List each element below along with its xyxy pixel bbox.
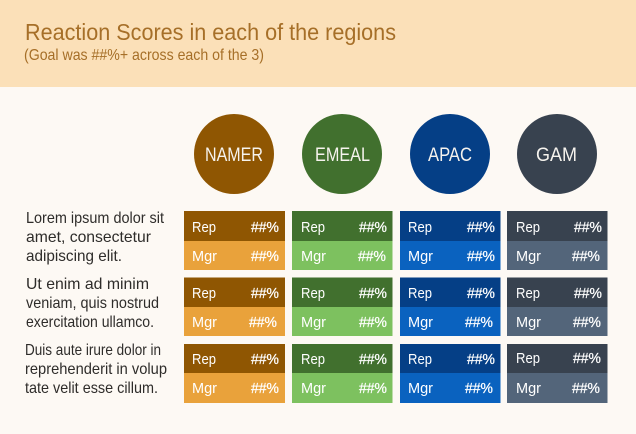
card: APAC row 3: Mgr <box>408 380 433 397</box>
circle: GAM <box>517 114 597 194</box>
card: APAC row 1: Mgr <box>408 248 433 265</box>
card: GAM row 2: ##% <box>573 315 601 331</box>
card: NAMER row 2: ##% <box>251 286 279 302</box>
card: GAM row 1 <box>507 211 608 270</box>
card: GAM row 2: Rep <box>516 285 540 302</box>
card: EMEAL row 1: Mgr <box>301 248 326 265</box>
card: APAC row 1 <box>400 211 500 270</box>
card: EMEAL row 1: Rep <box>301 219 325 236</box>
card: GAM row 1: Rep <box>516 219 540 236</box>
card: NAMER row 3: ##% <box>251 352 279 368</box>
card: GAM row 1: Mgr <box>516 248 541 265</box>
card: APAC row 2: Mgr <box>408 314 433 331</box>
card: GAM row 3 <box>507 344 608 403</box>
circle: NAMER <box>194 114 274 194</box>
circle: GAM: GAM <box>536 145 577 166</box>
card: APAC row 1: ##% <box>467 220 495 236</box>
card: EMEAL row 2 <box>292 278 392 336</box>
row 2 description <box>26 276 159 331</box>
subtitle: (Goal was ##%+ across each of the 3) <box>24 47 264 64</box>
card: GAM row 1: ##% <box>572 249 600 265</box>
card: EMEAL row 3: ##% <box>359 352 387 368</box>
card: EMEAL row 2: Mgr <box>301 314 326 331</box>
card: NAMER row 2: Mgr <box>192 314 217 331</box>
card: NAMER row 1: Rep <box>192 219 216 236</box>
circle: EMEAL <box>302 114 382 194</box>
row 2 description: Ut enim ad minim <box>26 276 149 293</box>
card: APAC row 2: ##% <box>465 315 493 331</box>
card: APAC row 2 <box>400 278 500 336</box>
card: NAMER row 3: Rep <box>192 351 216 368</box>
card: GAM row 3: Mgr <box>516 380 541 397</box>
card: NAMER row 1: ##% <box>251 249 279 265</box>
row 1 description: Lorem ipsum dolor sit <box>26 210 164 227</box>
card: GAM row 2 <box>507 278 608 336</box>
header banner <box>0 0 636 87</box>
card: GAM row 2: Mgr <box>516 314 541 331</box>
card: EMEAL row 3: ##% <box>359 381 387 397</box>
card: EMEAL row 3: Mgr <box>301 380 326 397</box>
circle: APAC: APAC <box>428 145 472 166</box>
card: NAMER row 2: Rep <box>192 285 216 302</box>
card: APAC row 2: ##% <box>467 286 495 302</box>
card: NAMER row 3: ##% <box>251 381 279 397</box>
card: GAM row 2: ##% <box>574 286 602 302</box>
card: EMEAL row 2: ##% <box>359 315 387 331</box>
card: NAMER row 2 <box>184 278 285 336</box>
row 3 description: reprehenderit in volup <box>25 361 167 378</box>
card: EMEAL row 3 <box>292 344 392 403</box>
card: NAMER row 1: Mgr <box>192 248 217 265</box>
card: APAC row 3: Rep <box>408 351 432 368</box>
card: GAM row 3: ##% <box>572 381 600 397</box>
card: EMEAL row 1: ##% <box>359 220 387 236</box>
circle: EMEAL: EMEAL <box>315 145 370 166</box>
card: APAC row 1: ##% <box>467 249 495 265</box>
card: APAC row 1: Rep <box>408 219 432 236</box>
card: GAM row 3: ##% <box>573 351 601 367</box>
row 1 description <box>26 210 164 265</box>
card: EMEAL row 2: Rep <box>301 285 325 302</box>
card: NAMER row 2: ##% <box>249 315 277 331</box>
card: EMEAL row 2: ##% <box>359 286 387 302</box>
card: APAC row 3: ##% <box>465 381 493 397</box>
card: EMEAL row 3: Rep <box>301 351 325 368</box>
card: NAMER row 1 <box>184 211 285 270</box>
card: APAC row 3: ##% <box>467 352 495 368</box>
circle: NAMER: NAMER <box>205 145 263 166</box>
card: EMEAL row 1 <box>292 211 392 270</box>
circle: APAC <box>410 114 490 194</box>
card: NAMER row 3: Mgr <box>192 380 217 397</box>
row 1 description: amet, consectetur <box>26 229 152 246</box>
row 2 description: exercitation ullamco. <box>26 314 154 331</box>
card: APAC row 2: Rep <box>408 285 432 302</box>
card: NAMER row 3 <box>184 344 285 403</box>
title: Reaction Scores in each of the regions <box>25 19 396 45</box>
row 3 description <box>25 342 167 397</box>
card: EMEAL row 1: ##% <box>358 249 386 265</box>
row 3 description: Duis aute irure dolor in <box>25 342 161 359</box>
row 1 description: adipiscing elit. <box>26 248 122 265</box>
card: GAM row 1: ##% <box>574 220 602 236</box>
card: GAM row 3: Rep <box>516 350 540 367</box>
card: NAMER row 1: ##% <box>251 220 279 236</box>
row 2 description: veniam, quis nostrud <box>26 295 159 312</box>
row 3 description: tate velit esse cillum. <box>25 380 158 397</box>
card: APAC row 3 <box>400 344 500 403</box>
